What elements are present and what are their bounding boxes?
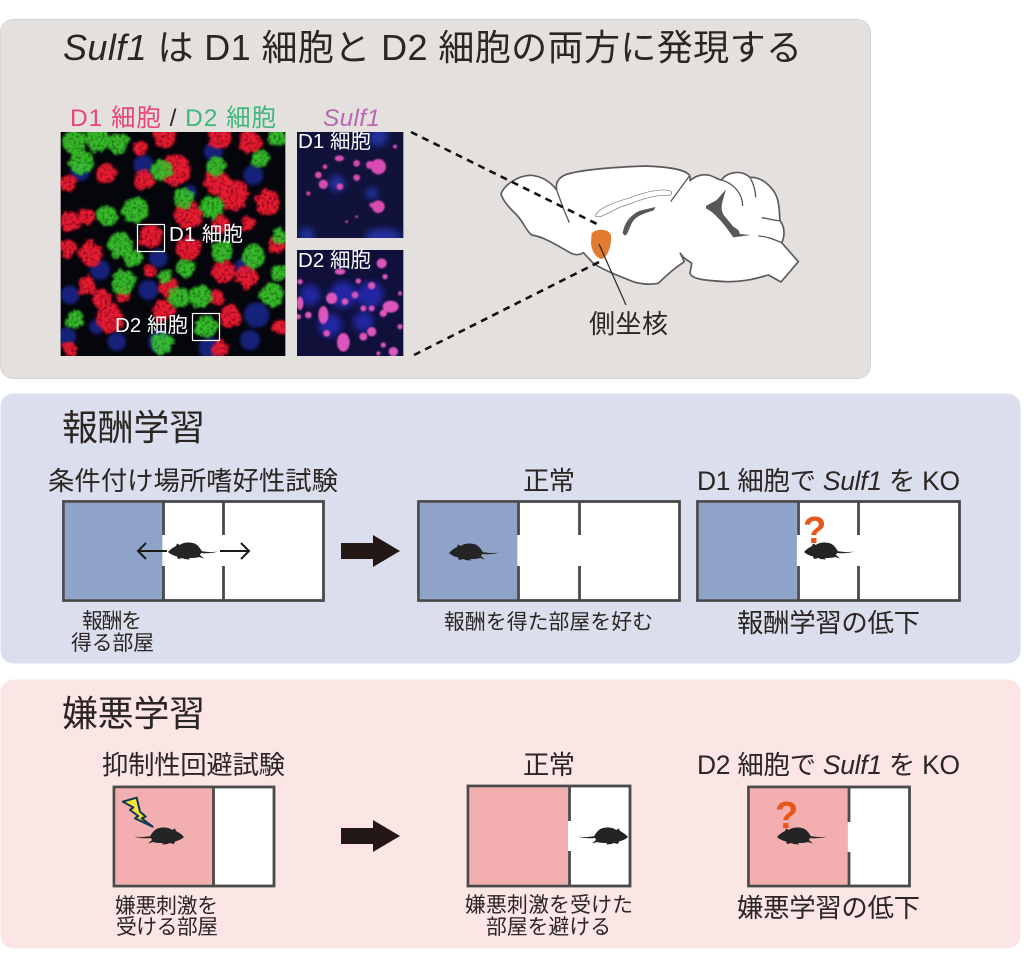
chamber: D2 KO xyxy=(748,787,910,886)
caption: reward room: 得る部屋 xyxy=(71,632,154,655)
D1 cell marker xyxy=(138,224,164,252)
inset: D2 cell Sulf1 xyxy=(296,249,403,356)
mouse xyxy=(449,544,499,560)
caption: shock room: 嫌悪刺激を xyxy=(115,895,218,918)
chamber: normal xyxy=(418,501,680,601)
arrow: progression xyxy=(341,535,400,567)
result text: 嫌悪学習の低下 xyxy=(737,893,920,923)
chamber: normal xyxy=(468,786,630,886)
caption: avoids shock room: 部屋を避ける xyxy=(486,916,611,939)
test name: 条件付け場所嗜好性試験 xyxy=(48,466,338,496)
caption: shock room: 受ける部屋 xyxy=(116,916,218,939)
label: nucleus accumbens: 側坐核 xyxy=(589,309,668,339)
mouse xyxy=(578,828,628,844)
chamber: D1 KO xyxy=(698,501,960,601)
micrograph: D1 and D2 cells xyxy=(57,125,288,360)
heading: 報酬学習 xyxy=(62,407,205,448)
icon: lightning xyxy=(123,798,153,827)
chamber: inhibitory avoidance xyxy=(114,787,274,886)
caption: reward room: 報酬を xyxy=(82,610,142,633)
arrow: left xyxy=(138,543,167,559)
result name: normal: 正常 xyxy=(523,466,575,496)
question mark: ? xyxy=(803,510,826,552)
result text: 報酬学習の低下 xyxy=(737,608,920,638)
test name: 抑制性回避試験 xyxy=(102,750,285,780)
result name: D2 KO: D2 細胞で Sulf1 を KO xyxy=(697,750,960,780)
result name: D1 KO: D1 細胞で Sulf1 を KO xyxy=(697,466,960,496)
D2 cell marker xyxy=(192,314,220,340)
result name: normal: 正常 xyxy=(523,750,575,780)
nucleus accumbens xyxy=(591,230,611,259)
panel: reward learning xyxy=(0,394,1020,664)
panel: Sulf1 expression xyxy=(0,20,870,378)
D2 cell label: D2 細胞 xyxy=(115,314,188,337)
mouse xyxy=(777,828,827,844)
zoom guide lines xyxy=(411,132,599,355)
question mark: ? xyxy=(775,795,798,837)
inset label: D2 細胞 xyxy=(298,249,371,272)
leader line xyxy=(599,244,626,305)
D1 cell label: D1 細胞 xyxy=(169,223,243,246)
chamber: conditioned place preference xyxy=(64,501,324,601)
brain diagram xyxy=(501,166,798,305)
title: Sulf1 は D1 細胞と D2 細胞の両方に発現する xyxy=(63,27,802,68)
caption: avoids shock room: 嫌悪刺激を受けた xyxy=(465,894,633,917)
heading: 嫌悪学習 xyxy=(62,693,205,734)
mouse xyxy=(168,543,218,560)
micrograph heading: D1 細胞 / D2 細胞 xyxy=(70,104,276,132)
arrow: right xyxy=(220,543,249,559)
panel: aversive learning xyxy=(0,680,1020,948)
inset: D1 cell Sulf1 xyxy=(297,127,403,245)
mouse xyxy=(804,543,854,560)
inset label: D1 細胞 xyxy=(298,130,371,153)
arrow: progression xyxy=(341,820,400,852)
caption: prefers reward room: 報酬を得た部屋を好む xyxy=(444,611,653,634)
Sulf1 heading: Sulf1 xyxy=(323,105,380,132)
mouse xyxy=(134,828,184,844)
